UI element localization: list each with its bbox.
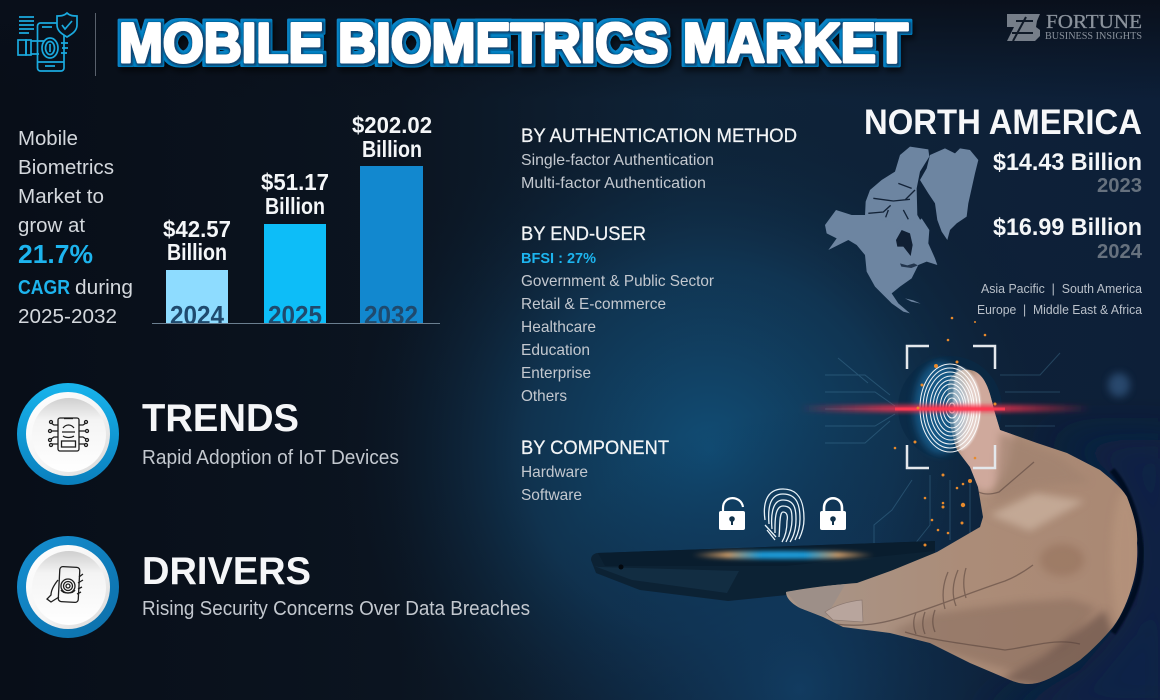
bar 2032: 2032	[364, 300, 418, 330]
scanned fingerprint	[920, 364, 980, 452]
far fingertip	[786, 583, 846, 617]
region values: $14.43 Billion	[993, 149, 1142, 176]
segment: end-user: Enterprise	[521, 365, 591, 382]
red scan line	[800, 405, 1090, 412]
hand	[780, 360, 1150, 690]
segment: end-user: BY END-USER	[521, 223, 646, 245]
segment: component: Hardware	[521, 464, 588, 481]
bar 2032: Billion	[362, 136, 422, 162]
finger creases	[835, 462, 1080, 650]
scanner halo	[898, 356, 1002, 460]
thumb base shadow	[994, 432, 1070, 490]
thumb tone	[957, 368, 1013, 492]
text block: CAGR statement: 2025-2032	[18, 306, 117, 328]
icon: fingerprint	[764, 489, 804, 542]
segment: authentication method: Multi-factor Authentication	[521, 175, 706, 192]
segment: end-user: Healthcare	[521, 319, 596, 336]
bar 2025: 2025	[268, 300, 322, 330]
text block: CAGR statement: CAGR	[18, 277, 70, 299]
icon: closed lock	[820, 498, 846, 530]
other regions: Asia Pacific | South America	[981, 281, 1143, 296]
region values: 2023	[1097, 175, 1142, 197]
bar chart: market size	[152, 112, 440, 330]
header divider	[94, 13, 96, 76]
segment: end-user: Education	[521, 342, 590, 359]
drivers badge	[17, 536, 119, 638]
bar 2024	[163, 220, 230, 323]
other regions	[977, 281, 1143, 317]
bar 2024: $42.57	[163, 216, 231, 242]
fingernail	[825, 600, 863, 622]
circuit traces	[825, 353, 1060, 550]
trends heading: TRENDS	[142, 397, 299, 440]
icon: circuit phone	[48, 418, 88, 451]
region values: 2024	[1097, 241, 1143, 263]
text block: CAGR statement: 21.7%	[18, 239, 93, 269]
segment: component	[521, 437, 669, 504]
logo: Fortune Business Insights	[1007, 11, 1142, 42]
text block: CAGR statement	[18, 128, 133, 328]
sparks	[894, 317, 996, 546]
bar 2025	[261, 169, 329, 330]
bar 2025: $51.17	[261, 169, 329, 195]
other regions: Europe | Middle East & Africa	[977, 302, 1143, 317]
region values	[993, 149, 1143, 263]
phone	[591, 541, 935, 601]
lower hand shadow	[891, 599, 1096, 672]
segment: end-user: Others	[521, 388, 567, 405]
segment: component: BY COMPONENT	[521, 437, 669, 459]
segment: authentication method: BY AUTHENTICATION METHOD	[521, 125, 797, 147]
panel: segmentation	[521, 125, 797, 504]
bar 2024: Billion	[167, 239, 227, 265]
icon: hand with phone fingerprint	[47, 567, 83, 603]
bar 2024: 2024	[170, 300, 225, 330]
logo: Fortune Business Insights: FORTUNE	[1046, 11, 1142, 33]
bar 2025: Billion	[265, 193, 325, 219]
segment: component: Software	[521, 487, 582, 504]
trends badge	[17, 383, 119, 485]
segment: authentication method	[521, 125, 797, 192]
title: MOBILE BIOMETRICS MARKET	[119, 11, 908, 74]
text block: CAGR statement: Mobile	[18, 128, 78, 150]
chart baseline	[152, 322, 440, 324]
jacket sleeve	[980, 373, 1160, 700]
icon: biometric phone	[18, 13, 77, 71]
segment: end-user: Government & Public Sector	[521, 273, 715, 290]
icons: locks and fingerprint	[719, 489, 846, 542]
bar 2032: $202.02	[352, 112, 432, 138]
region heading: NORTH AMERICA	[864, 103, 1142, 142]
drivers heading: DRIVERS	[142, 550, 311, 593]
segment: end-user: BFSI : 27%	[521, 250, 596, 267]
trends text: Rapid Adoption of IoT Devices	[142, 447, 399, 469]
text block: CAGR statement: grow at	[18, 215, 85, 237]
segment: end-user: Retail & E-commerce	[521, 296, 666, 313]
logo: Fortune Business Insights: BUSINESS INSIGHTS	[1045, 31, 1142, 42]
text block: CAGR statement: Biometrics	[18, 157, 114, 179]
palm highlight	[990, 493, 1085, 531]
text block: CAGR statement: during	[75, 277, 133, 299]
bar 2032	[352, 112, 432, 330]
fingerprint scanner	[800, 346, 1090, 468]
phone glow	[691, 551, 875, 559]
map: North America	[825, 147, 978, 313]
region values: $16.99 Billion	[993, 214, 1142, 241]
segment: authentication method: Single-factor Authentication	[521, 152, 714, 169]
icon: open lock	[719, 498, 745, 530]
drivers text: Rising Security Concerns Over Data Breaches	[142, 598, 530, 620]
scanner frame	[907, 346, 995, 468]
segment: end-user	[521, 223, 715, 405]
text block: CAGR statement: Market to	[18, 186, 104, 208]
